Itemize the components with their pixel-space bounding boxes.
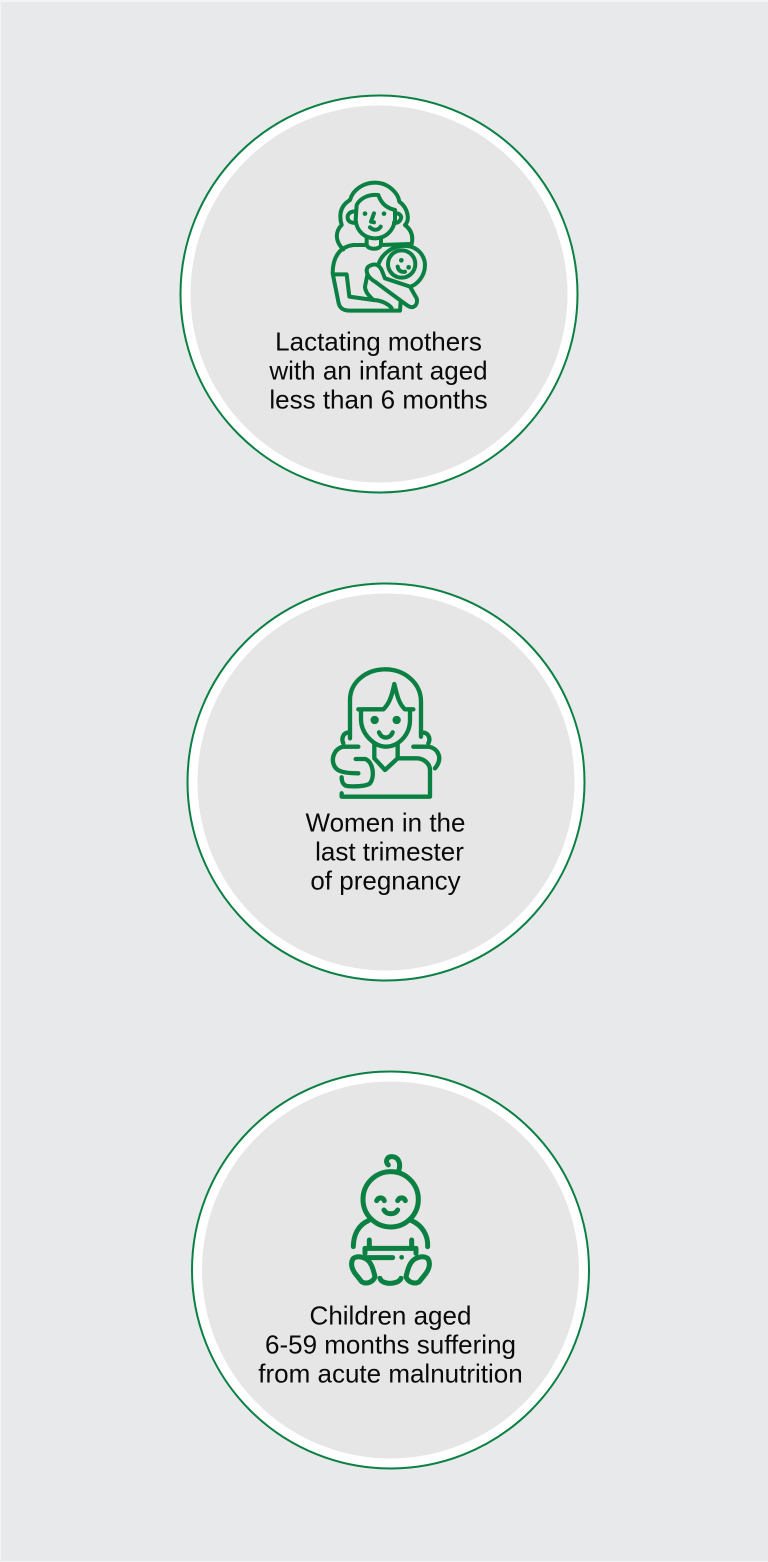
text: children with acute malnutrition: from acute malnutrition	[258, 1358, 523, 1388]
circle badge	[188, 584, 584, 980]
circle badge	[192, 1072, 589, 1468]
text: women in last trimester: last trimester	[315, 836, 464, 866]
icon: mother holding infant	[333, 183, 425, 311]
icon: baby	[352, 1157, 429, 1283]
circle badge	[180, 96, 578, 492]
icon: pregnant woman	[333, 669, 439, 797]
text: women in last trimester: Women in the	[306, 808, 465, 838]
panel: lactating mothers	[180, 96, 578, 492]
text: women in last trimester: of pregnancy	[310, 866, 461, 896]
panel: malnourished children	[192, 1072, 589, 1468]
text: lactating mothers: Lactating mothers	[275, 326, 482, 356]
text: children with acute malnutrition: 6-59 months suffering	[265, 1330, 516, 1360]
panel: pregnant women	[188, 584, 584, 980]
text: lactating mothers: less than 6 months	[269, 384, 488, 414]
text: children with acute malnutrition: Children aged	[310, 1300, 471, 1330]
text: lactating mothers: with an infant aged	[268, 356, 488, 386]
